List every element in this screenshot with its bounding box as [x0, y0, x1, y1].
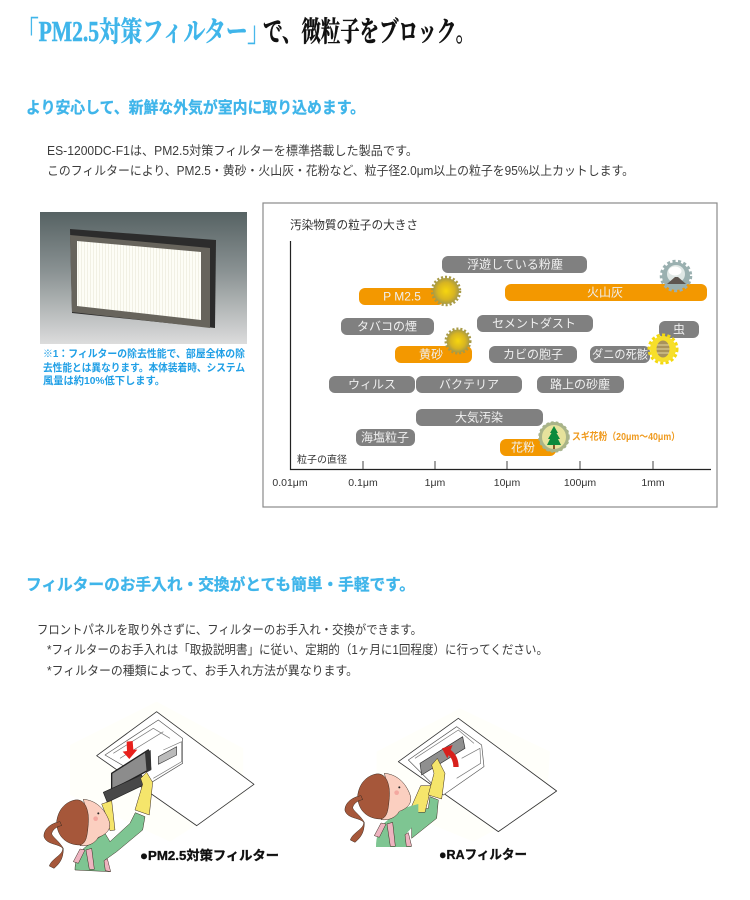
axis labels — [272, 477, 665, 489]
chart title: 汚染物質の粒子の大きさ — [290, 217, 418, 232]
axis labels: 0.1μm — [348, 477, 378, 489]
intro text: ES-1200DC-F1は、PM2.5対策フィルターを標準搭載した製品です。 — [47, 143, 418, 158]
bar labels: 浮遊している粉塵 — [467, 258, 563, 272]
axis labels: 100μm — [564, 477, 596, 489]
bar labels: 黄砂 — [419, 348, 443, 362]
axis labels: 1μm — [425, 477, 446, 489]
bar labels: 海塩粒子 — [361, 430, 409, 444]
bar labels: 火山灰 — [587, 286, 623, 300]
bar labels: カビの胞子 — [503, 348, 563, 362]
maintenance text — [37, 622, 548, 678]
axis title: 粒子の直径 — [297, 453, 347, 466]
gray bars — [329, 256, 699, 446]
photo caption: ※1：フィルターの除去性能で、部屋全体の除 — [43, 347, 245, 360]
axes — [290, 241, 711, 470]
photo caption: 去性能とは異なります。本体装着時、システム — [43, 361, 245, 374]
bar labels: 路上の砂塵 — [550, 376, 610, 392]
intro text: このフィルターにより、PM2.5・黄砂・火山灰・花粉など、粒子径2.0μm以上の粒子を95%以上カットします。 — [47, 163, 634, 178]
woman — [345, 773, 418, 847]
title: 「PM2.5対策フィルター」 — [17, 16, 269, 48]
illustration: RA filter replacement — [345, 708, 557, 847]
axis labels: 0.01μm — [272, 477, 308, 489]
icon: cedar tree — [540, 423, 568, 451]
title: で、微粒子をブロック。 — [263, 16, 475, 48]
orange bars — [359, 284, 707, 456]
label: RA filter: ●RAフィルター — [439, 847, 527, 862]
bar labels — [348, 258, 685, 454]
cedar pollen note: スギ花粉（20μm〜40μm） — [572, 430, 680, 443]
photo caption: 風量は約10%低下します。 — [43, 374, 165, 387]
bar labels: 虫 — [673, 322, 685, 336]
woman — [44, 799, 145, 872]
illustration: PM2.5 filter replacement — [44, 702, 254, 872]
heading: maintenance: フィルターのお手入れ・交換がとても簡単・手軽です。 — [26, 575, 415, 594]
icon: yellow sand particle — [446, 329, 470, 353]
photo caption — [43, 347, 245, 387]
filter photo — [40, 212, 247, 344]
intro text — [47, 143, 634, 178]
label: PM2.5 filter: ●PM2.5対策フィルター — [140, 848, 279, 863]
bar labels: 大気汚染 — [455, 410, 503, 424]
maintenance text: *フィルターのお手入れは「取扱説明書」に従い、定期的（1ヶ月に1回程度）に行ってください。 — [47, 642, 548, 657]
bar labels: 花粉 — [511, 440, 535, 454]
maintenance text: フロントパネルを取り外さずに、フィルターのお手入れ・交換ができます。 — [37, 622, 422, 637]
axis labels: 1mm — [641, 477, 665, 489]
axis labels: 10μm — [494, 477, 520, 489]
icon: PM2.5 particle — [432, 278, 460, 304]
bar labels: バクテリア — [439, 378, 499, 392]
maintenance text: *フィルターの種類によって、お手入れ方法が異なります。 — [47, 663, 358, 678]
bar labels: タバコの煙 — [357, 320, 417, 334]
bar labels: P M2.5 — [383, 290, 421, 304]
bar labels: セメントダスト — [492, 316, 576, 330]
heading: fresh air: より安心して、新鮮な外気が室内に取り込めます。 — [26, 98, 365, 117]
icon: mite — [650, 336, 676, 362]
icon: volcano — [662, 262, 690, 290]
bar labels: ウィルス — [348, 378, 396, 392]
panel: particle size chart — [263, 203, 717, 507]
bar labels: ダニの死骸 — [592, 346, 648, 362]
title — [17, 16, 475, 48]
